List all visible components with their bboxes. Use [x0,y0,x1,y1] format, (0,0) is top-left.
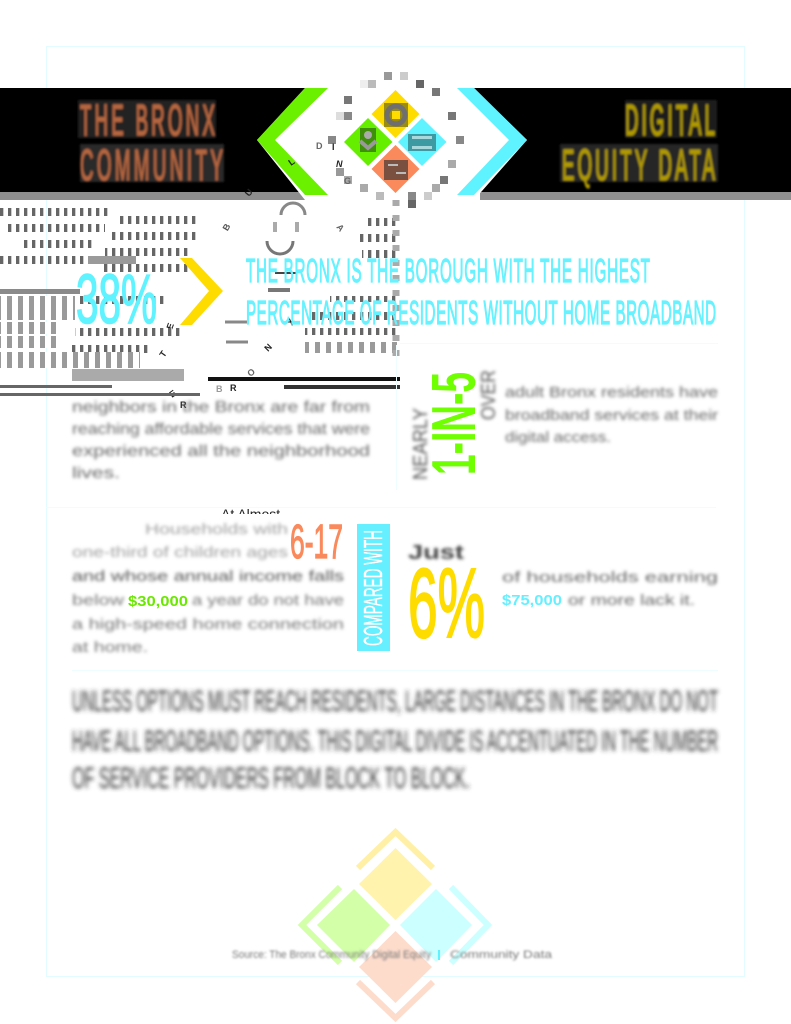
text: school-age households: a high-speed home connection [72,616,344,633]
text: school-age households: a year do not have [192,592,344,609]
paragraph: neighbourhood access: reaching affordable services that were [72,421,370,438]
text: school-age households: and whose annual income falls [72,568,344,585]
text: high income comparison [502,569,718,609]
stat: 1-in-5: OVER [478,370,500,420]
heading: highest percentage: THE BRONX IS THE BOROUGH WITH THE HIGHEST [246,254,650,290]
heading: highest percentage: PERCENTAGE OF RESIDENTS WITHOUT HOME BROADBAND [246,296,716,332]
header band [0,88,791,200]
icon: blocks [384,160,408,180]
circular slogan letters: A [334,222,347,234]
scattered logo dots [328,72,464,208]
glitched text fragments right [208,200,400,389]
text: 1-in-5 description [505,384,718,446]
circular slogan letters: X [285,317,297,327]
text: 1-in-5 description: digital access. [505,429,611,446]
stat: 6%: 6% [408,548,485,658]
icon: target [384,103,408,127]
green chevron [257,88,328,195]
closing statement [72,685,718,795]
circular slogan letters: D [316,141,323,151]
icon: stacked bars [408,134,436,151]
label: compared with: COMPARED WITH [358,530,388,646]
closing statement: OF SERVICE PROVIDERS FROM BLOCK TO BLOCK. [72,762,470,795]
text: high income comparison: or more lack it. [568,592,695,609]
yellow chevron [180,258,223,325]
stat: $30,000: $30,000 [128,593,188,610]
glitched text fragments left [0,208,200,396]
header title right: EQUITY DATA [562,141,715,190]
header title left: COMMUNITY [80,141,223,190]
circular slogan letters: G [344,176,351,186]
header title left [78,96,224,190]
footer source [232,949,553,961]
circular slogan letters: B [216,384,223,394]
stat: ages 6-17: 6-17 [290,516,343,569]
logo: four diamonds with icons [344,90,446,193]
text: school-age households [72,521,344,656]
text: 1-in-5 description: broadband services at their [505,407,718,424]
text: 1-in-5 description: adult Bronx residents have [505,384,718,401]
cyan chevron [457,88,527,195]
text: school-age households: one-third of children ages [72,544,288,561]
heading: highest percentage [246,254,716,332]
stat: 1-in-5: NEARLY [410,408,432,480]
header title right [560,96,718,190]
circular slogan letters: N [262,342,274,353]
paragraph: neighbourhood access: lives. [72,465,120,482]
text: school-age households: below [72,592,124,609]
circular slogan letters: I [332,142,335,152]
watermark logo [302,832,488,1018]
circle glyph fragments [225,203,305,342]
stat: 38%: 38% [76,260,157,338]
header title left: THE BRONX [80,96,215,145]
circular slogan letters: B [221,221,233,232]
circular slogan letters [157,141,351,410]
text: high income comparison: of households earning [502,569,718,586]
text: school-age households: at home. [72,639,148,656]
circular slogan letters: T [162,372,174,383]
paragraph: neighbourhood access: experienced all the neighborhood [72,443,370,460]
icon: person [360,128,376,152]
label: compared with [357,524,390,651]
stat: 1-in-5 [410,370,500,480]
text: at almost: At Almost [221,506,280,522]
circular slogan letters: E [164,322,176,331]
circular slogan letters: T [157,348,169,359]
circular slogan letters: E [167,388,178,400]
circular slogan letters: R [230,383,237,393]
footer source: Community Data [450,949,553,961]
footer source: Source: The Bronx Community Digital Equity [232,949,431,961]
paragraph: neighbourhood access: neighbors in the Bronx are far from [72,399,370,416]
text: just: Just [408,542,464,564]
text: school-age households: Households with [145,521,288,538]
paragraph: neighbourhood access [72,399,370,482]
circular slogan letters: N [336,159,343,169]
circular slogan letters: R [180,400,187,410]
circular slogan letters: O [245,366,257,379]
stat: $75,000: $75,000 [502,592,562,609]
header title right: DIGITAL [625,96,715,145]
stat: 1-in-5: 1-IN-5 [420,372,489,475]
circular slogan letters: L [286,156,297,168]
circular slogan letters: U [243,187,255,198]
